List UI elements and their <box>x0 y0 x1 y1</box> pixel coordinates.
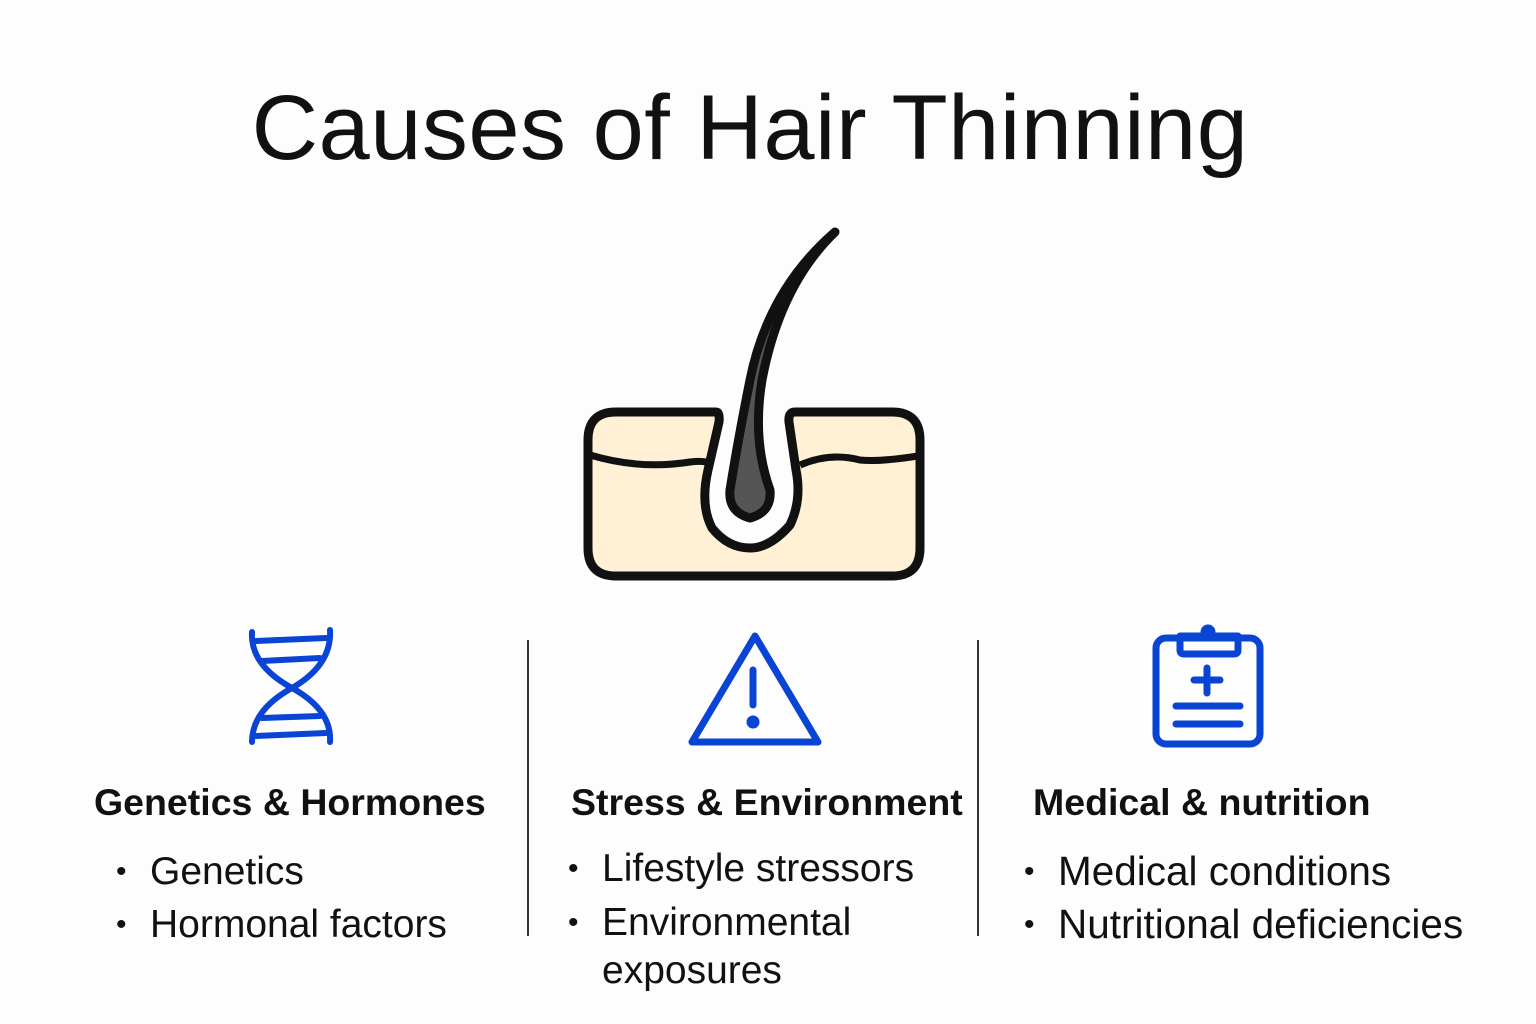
list: genetics: Hormonal factors <box>150 903 447 946</box>
icon: dna <box>248 627 334 745</box>
list: genetics <box>117 850 447 946</box>
icon: clipboard <box>1152 624 1264 748</box>
list: medical <box>1025 848 1463 947</box>
list: medical: Nutritional deficiencies <box>1058 901 1463 947</box>
list: stress <box>569 847 914 992</box>
title: Causes of Hair Thinning <box>252 77 1248 179</box>
list: medical: Medical conditions <box>1058 848 1391 894</box>
heading: genetics: Genetics & Hormones <box>94 781 486 823</box>
heading: stress: Stress & Environment <box>571 781 963 823</box>
list: stress: Lifestyle stressors <box>602 847 914 890</box>
list: stress: exposures <box>602 949 782 992</box>
list: stress: Environmental <box>602 901 851 944</box>
list: genetics: Genetics <box>150 850 304 893</box>
heading: medical: Medical & nutrition <box>1033 781 1370 823</box>
icon: warning <box>688 632 822 746</box>
